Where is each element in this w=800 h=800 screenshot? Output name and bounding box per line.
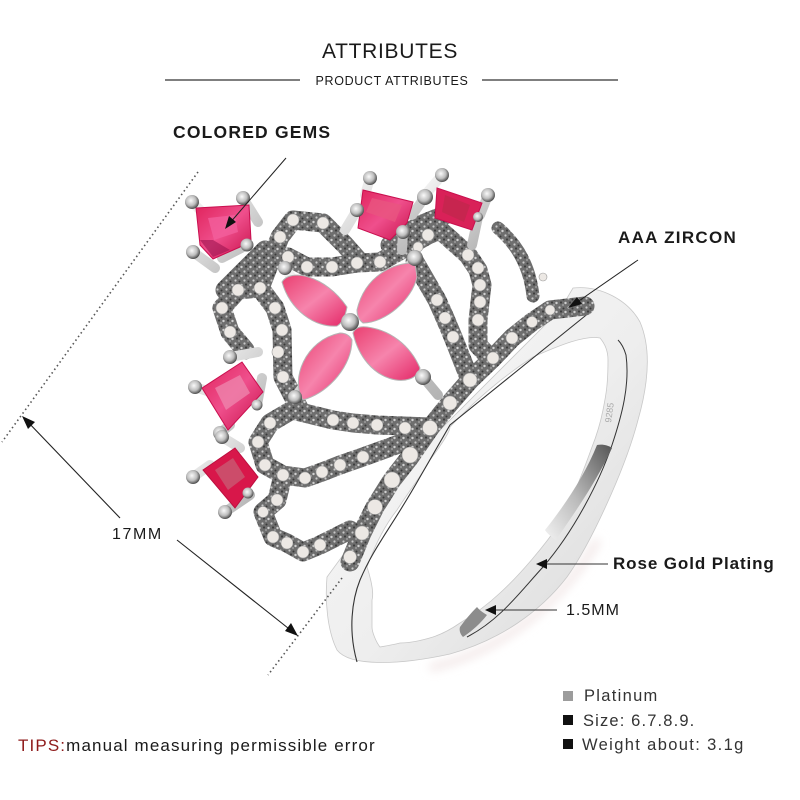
ring illustration xyxy=(185,168,647,668)
spec: weight: Weight about: 3.1g xyxy=(582,736,745,754)
flower gem xyxy=(282,263,420,400)
square gem top centre xyxy=(358,190,413,240)
prong heads xyxy=(185,168,495,519)
dimension arrow lower xyxy=(177,540,298,636)
crown right inner arch xyxy=(498,228,533,296)
prong stems xyxy=(192,175,488,512)
title: ATTRIBUTES xyxy=(322,40,458,63)
label: rose gold plating: Rose Gold Plating xyxy=(613,554,775,573)
arrow: AAA zircon xyxy=(568,260,638,308)
dotted measure guide lower xyxy=(268,578,342,675)
arrow: rose gold plating xyxy=(536,559,608,569)
label: colored gems: COLORED GEMS xyxy=(173,122,331,142)
square gem left lower xyxy=(203,448,258,508)
arrow: colored gems xyxy=(225,158,286,229)
square gem left upper xyxy=(202,362,263,430)
label: AAA zircon: AAA ZIRCON xyxy=(618,228,737,247)
label: 17MM: 17MM xyxy=(112,526,163,543)
spec: material: Platinum xyxy=(584,687,659,705)
inner band highlights xyxy=(545,445,612,540)
square gem top left xyxy=(196,205,251,259)
dimension arrow upper xyxy=(22,416,120,518)
spec list xyxy=(563,687,745,754)
crown openwork xyxy=(222,215,585,562)
crown zircon stones xyxy=(216,214,555,564)
ring shadow xyxy=(430,540,598,668)
ring edge lines xyxy=(352,312,590,662)
tips note: TIPS:manual measuring permissible error xyxy=(18,736,376,755)
dotted measure guide upper xyxy=(2,172,198,442)
ring band xyxy=(326,288,647,663)
spec: size: Size: 6.7.8.9. xyxy=(583,712,695,730)
arrow: 1.5MM xyxy=(485,605,557,615)
square gem top right xyxy=(435,188,482,230)
label: 1.5MM: 1.5MM xyxy=(566,602,620,619)
hallmark: 9285 xyxy=(603,402,616,423)
subtitle with divider rules: PRODUCT ATTRIBUTES xyxy=(316,74,468,88)
